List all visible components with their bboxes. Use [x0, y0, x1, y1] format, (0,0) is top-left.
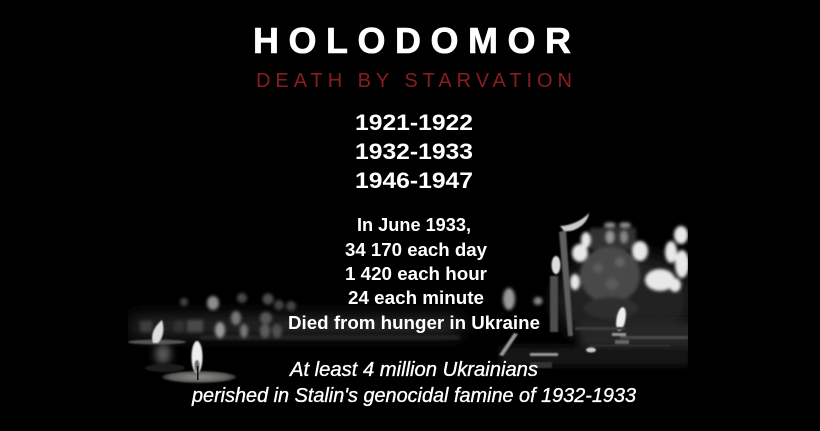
lantern [580, 222, 640, 319]
title: HOLODOMOR [253, 20, 571, 61]
subtitle: DEATH BY STARVATION [256, 70, 572, 92]
death toll statistics: 1 420 each hour [345, 264, 487, 284]
closing statement: At least 4 million Ukrainians [289, 359, 538, 381]
bokeh lights [140, 293, 296, 338]
closing statement: perished in Stalin's genocidal famine of 1932-1933 [191, 385, 636, 407]
candle photograph [128, 213, 700, 383]
ground glow [130, 318, 460, 334]
famine years: 1932-1933 [355, 139, 473, 164]
wet table reflections [530, 327, 688, 368]
famine years: 1946-1947 [355, 168, 473, 193]
tall candle and flames [499, 213, 628, 356]
right candles [499, 213, 700, 368]
horizon line [200, 336, 460, 339]
table surface [500, 322, 700, 366]
death toll statistics [288, 215, 540, 333]
death toll statistics: In June 1933, [357, 215, 471, 235]
death toll statistics: 34 170 each day [345, 240, 487, 260]
left candles and bokeh lights [128, 293, 460, 383]
famine years [355, 110, 473, 193]
front candle dish [145, 341, 236, 383]
death toll statistics: 24 each minute [348, 288, 484, 308]
death toll statistics: Died from hunger in Ukraine [288, 313, 540, 333]
back candle dish [128, 320, 186, 364]
infographic canvas [128, 27, 688, 406]
closing statement [191, 359, 636, 407]
famine years: 1921-1922 [355, 110, 473, 135]
bright bokeh [503, 226, 689, 310]
background glow [558, 250, 688, 338]
